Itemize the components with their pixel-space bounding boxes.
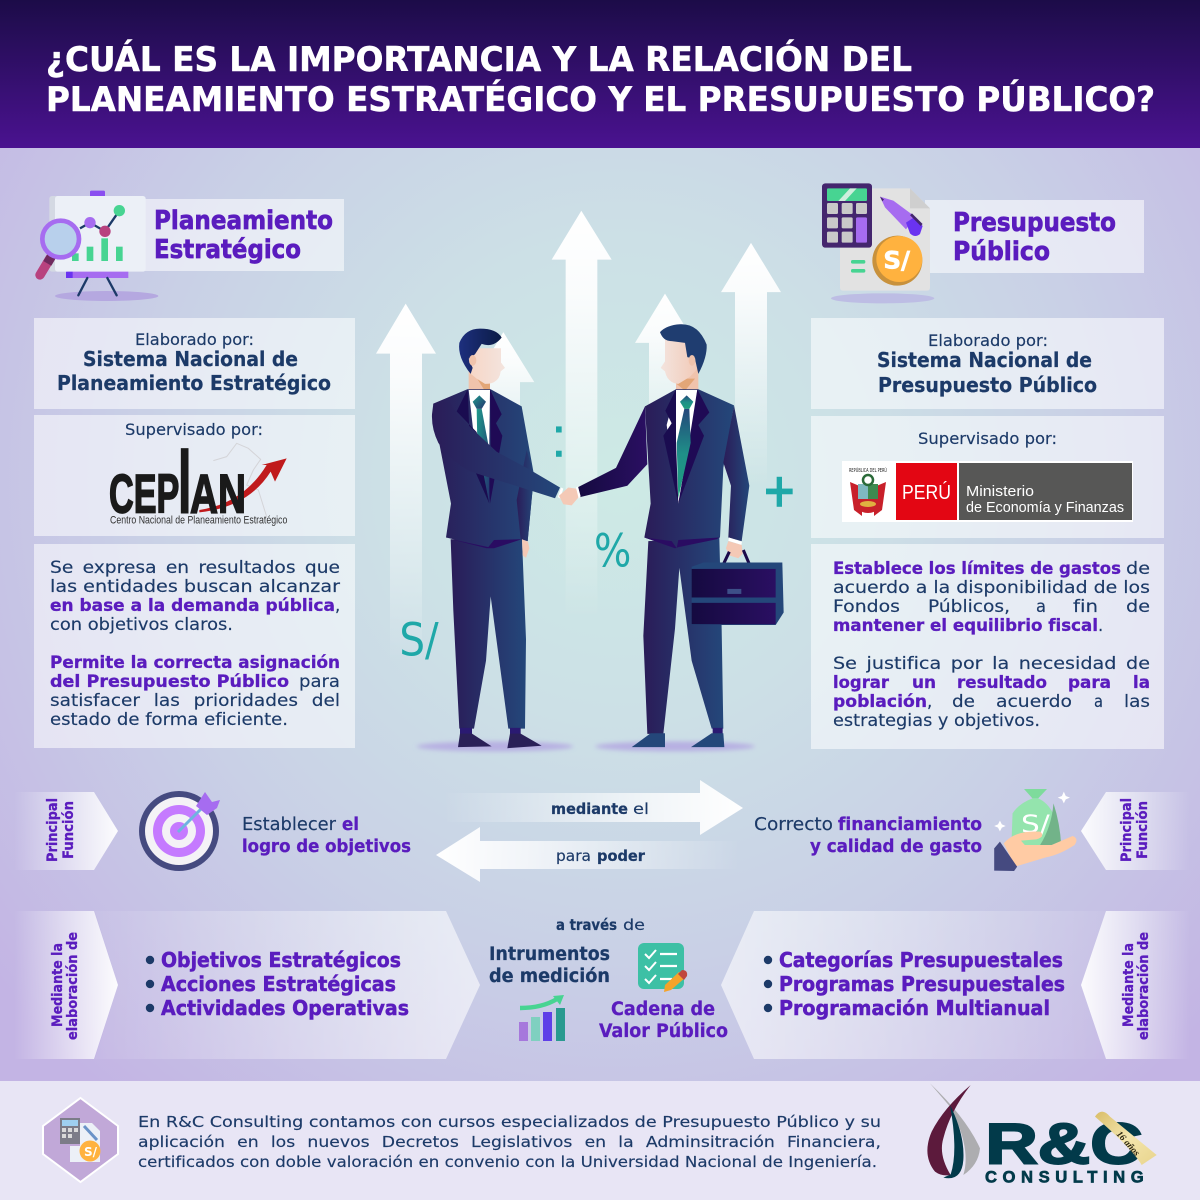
text block right: las (1124, 692, 1150, 711)
text block left: Se expresa en resultados que (50, 558, 340, 577)
text: cadena de valor público: Valor Público (599, 1021, 728, 1042)
logo: Ministerio de Economía y Finanzas: de Economía y Finanzas (966, 499, 1124, 516)
heading: planeamiento estratégico: Planeamiento (154, 206, 333, 236)
text: instrumentos de medición (489, 944, 610, 987)
elaborado text right (877, 331, 1097, 397)
title: PLANEAMIENTO ESTRATÉGICO Y EL PRESUPUESTO PÚBLICO? (46, 79, 1155, 120)
arrow: para poder: poder (597, 847, 646, 865)
text block right: población (833, 692, 927, 711)
text block left (50, 558, 340, 729)
text block right: la (1133, 673, 1150, 692)
text block right: acuerdo a la disponibilidad de los (833, 578, 1150, 597)
text block right (833, 559, 1150, 730)
tab: mediante la elaboración de left: Mediante la (50, 943, 66, 1027)
icon: hexagon badge: S/ (84, 1145, 98, 1159)
text: correcto financiamiento: Correcto (754, 815, 833, 835)
icon: target with arrow (139, 791, 220, 871)
panel: elaborado por left (34, 318, 355, 409)
elaborado text left: Sistema Nacional de (83, 347, 298, 371)
text block right: a (1036, 597, 1046, 616)
list items: Objetivos Estratégicos (161, 948, 401, 972)
text block right: lograr (833, 673, 890, 692)
panel: supervisado por right: Supervisado por: (918, 429, 1057, 448)
text block right: para (1068, 673, 1111, 692)
text block left: en base a la demanda pública (50, 596, 335, 615)
tab: mediante la elaboración de right: Mediante la (1121, 943, 1137, 1027)
text block right: estrategias y objetivos. (833, 711, 1040, 730)
title: ¿CUÁL ES LA IMPORTANCIA Y LA RELACIÓN DEL (46, 39, 912, 80)
header band with title (0, 0, 1200, 148)
icon: money bag in hand: S/ (1021, 810, 1051, 839)
elaborado text left (57, 330, 331, 395)
icon: calculator, document and coin (822, 183, 934, 303)
elaborado text right: Presupuesto Público (878, 373, 1097, 397)
coat of arms: REPÚBLICA DEL PERÚ (849, 467, 887, 474)
text block left: del Presupuesto Público (50, 672, 289, 691)
tab: principal función right (1081, 792, 1190, 870)
tab: principal función left: Principal (45, 798, 61, 862)
tab: mediante la elaboración de right (1081, 911, 1190, 1059)
icon: bar chart with rising arrow (519, 995, 565, 1041)
heading: presupuesto público (953, 208, 1116, 267)
elaborado text left: Planeamiento Estratégico (57, 371, 331, 395)
text: instrumentos de medición: Intrumentos (489, 944, 610, 965)
text block left: , (335, 596, 340, 615)
elaborado text right: Elaborado por: (928, 331, 1048, 350)
text: cadena de valor público (599, 999, 728, 1042)
text block left: con objetivos claros. (50, 615, 233, 634)
text block right: de (1126, 597, 1150, 616)
text: a través de: de (623, 916, 645, 934)
text block right: . (1098, 616, 1103, 635)
text block left: las entidades buscan alcanzar (50, 577, 340, 596)
text block left: para (299, 672, 340, 691)
panel: descripción planeamiento (34, 544, 355, 748)
text block right: Públicos, (928, 597, 1010, 616)
panel: lista presupuestal (721, 911, 1106, 1059)
icon: checklist with pencil (638, 943, 687, 992)
text block right: Se justifica por la necesidad de (833, 654, 1150, 673)
growth arrows (376, 211, 781, 664)
text: correcto financiamiento (754, 815, 982, 857)
text: establecer el logro de objetivos: Establecer (242, 815, 337, 835)
tab: principal función right: Función (1135, 801, 1151, 859)
title (46, 39, 1155, 120)
list items: Programación Multianual (779, 996, 1050, 1020)
arrow: mediante el: mediante (551, 800, 628, 818)
logo: R&C Consulting: R&C (985, 1113, 1143, 1177)
logo: Ministerio de Economía y Finanzas: PERÚ (902, 481, 951, 504)
text block right: de (952, 692, 975, 711)
tab: principal función left: Función (61, 801, 77, 859)
panel: descripción presupuesto (811, 544, 1164, 749)
list items: Actividades Operativas (161, 996, 409, 1020)
list items: Acciones Estratégicas (161, 972, 396, 996)
handshake hands (559, 486, 581, 505)
text: promotional paragraph: certificados con doble valoración en convenio con la Universidad Nacional de Ingeniería. (138, 1153, 877, 1171)
list items: Programas Presupuestales (779, 972, 1065, 996)
panel: elaborado por right (811, 318, 1164, 409)
briefcase (692, 562, 784, 625)
arrow: mediante el: el (633, 800, 649, 818)
text block right: de (1126, 559, 1150, 578)
bullets (764, 956, 772, 1012)
list items (161, 948, 409, 1020)
list items (779, 948, 1065, 1020)
businessman right (577, 324, 784, 747)
panel: supervisado por left (34, 415, 355, 536)
text block right: acuerdo (996, 692, 1072, 711)
tab: principal función right: Principal (1119, 798, 1135, 862)
tab: mediante la elaboración de left (14, 911, 118, 1059)
logo: Ministerio de Economía y Finanzas (842, 461, 1133, 522)
panel: presupuesto heading (925, 200, 1144, 273)
logo: CEPLAN: Centro Nacional de Planeamiento Estratégico (110, 514, 287, 526)
businessman left (432, 329, 563, 748)
arrow: para poder: para (556, 847, 591, 865)
text block right: resultado (957, 673, 1047, 692)
logo: CEPLAN (109, 443, 287, 526)
panel: supervisado por left: Supervisado por: (125, 420, 263, 439)
heading: planeamiento estratégico (154, 206, 333, 265)
symbol: percent: % (594, 525, 631, 578)
logo: R&C Consulting: CONSULTING (985, 1167, 1144, 1186)
text: correcto financiamiento: y calidad de gasto (810, 837, 982, 857)
text block right: un (912, 673, 936, 692)
panel: supervisado por right (811, 416, 1164, 538)
tab: principal función left (14, 792, 118, 870)
icon: hexagon badge (43, 1098, 118, 1182)
text block right: fin (1073, 597, 1098, 616)
text: establecer el logro de objetivos (242, 815, 411, 857)
text block right: , (927, 692, 932, 711)
text block right: mantener el equilibrio fiscal (833, 616, 1098, 635)
floor shadows (417, 741, 755, 751)
bullets (146, 956, 154, 1012)
elaborado text right: Sistema Nacional de (877, 348, 1092, 372)
icon: calculator, document and coin: S/ (883, 247, 910, 275)
text block left: estado de forma eficiente. (50, 710, 288, 729)
list items: Categorías Presupuestales (779, 948, 1063, 972)
central illustration: arrows and businessmen (376, 211, 793, 751)
text: establecer el logro de objetivos: el (342, 815, 359, 835)
heading: planeamiento estratégico: Estratégico (154, 235, 301, 265)
tab: mediante la elaboración de left: elaboración de (65, 932, 81, 1040)
logo: CEPLAN: CEP (109, 463, 179, 525)
text block right: Fondos (833, 597, 900, 616)
text: promotional paragraph: En R&C Consulting contamos con cursos especializados de Presupuesto Público y su (138, 1113, 881, 1131)
coat of arms (849, 467, 887, 516)
elaborado text left: Elaborado por: (135, 330, 254, 349)
text: a través de: a través (556, 916, 617, 934)
text: correcto financiamiento: financiamiento (838, 815, 982, 835)
panel: planeamiento heading (145, 199, 344, 271)
text: instrumentos de medición: de medición (489, 966, 610, 987)
logo: R&C Consulting (927, 1083, 1157, 1186)
text: establecer el logro de objetivos: logro de objetivos (242, 837, 411, 857)
text block left: satisfacer las prioridades del (50, 691, 340, 710)
icon: presentation board with magnifier (40, 191, 158, 301)
text: cadena de valor público: Cadena de (611, 999, 715, 1020)
logo: CEPLAN: AN (190, 463, 246, 525)
text: promotional paragraph (138, 1113, 881, 1171)
tab: mediante la elaboración de right: elaboración de (1136, 932, 1152, 1040)
symbol: colon (556, 426, 562, 457)
arrow: mediante el (444, 780, 743, 835)
icon: money bag in hand (994, 789, 1076, 871)
text block right: a (1094, 692, 1103, 711)
symbol: plus (766, 477, 793, 507)
text block right: Establece los límites de gastos (833, 559, 1121, 578)
arrow: para poder (436, 827, 740, 882)
footer band (0, 1081, 1200, 1200)
logo: R&C Consulting: 16 años (1114, 1130, 1141, 1159)
text: promotional paragraph: aplicación en los nuevos Decretos Legislativos en la Adminsitración Financiera, (138, 1133, 881, 1151)
symbol: S/: S/ (399, 615, 439, 667)
logo: Ministerio de Economía y Finanzas: Ministerio (966, 483, 1034, 500)
heading: presupuesto público: Público (953, 237, 1050, 267)
panel: lista estratégica (95, 911, 480, 1059)
text block left: Permite la correcta asignación (50, 653, 340, 672)
heading: presupuesto público: Presupuesto (953, 208, 1116, 238)
